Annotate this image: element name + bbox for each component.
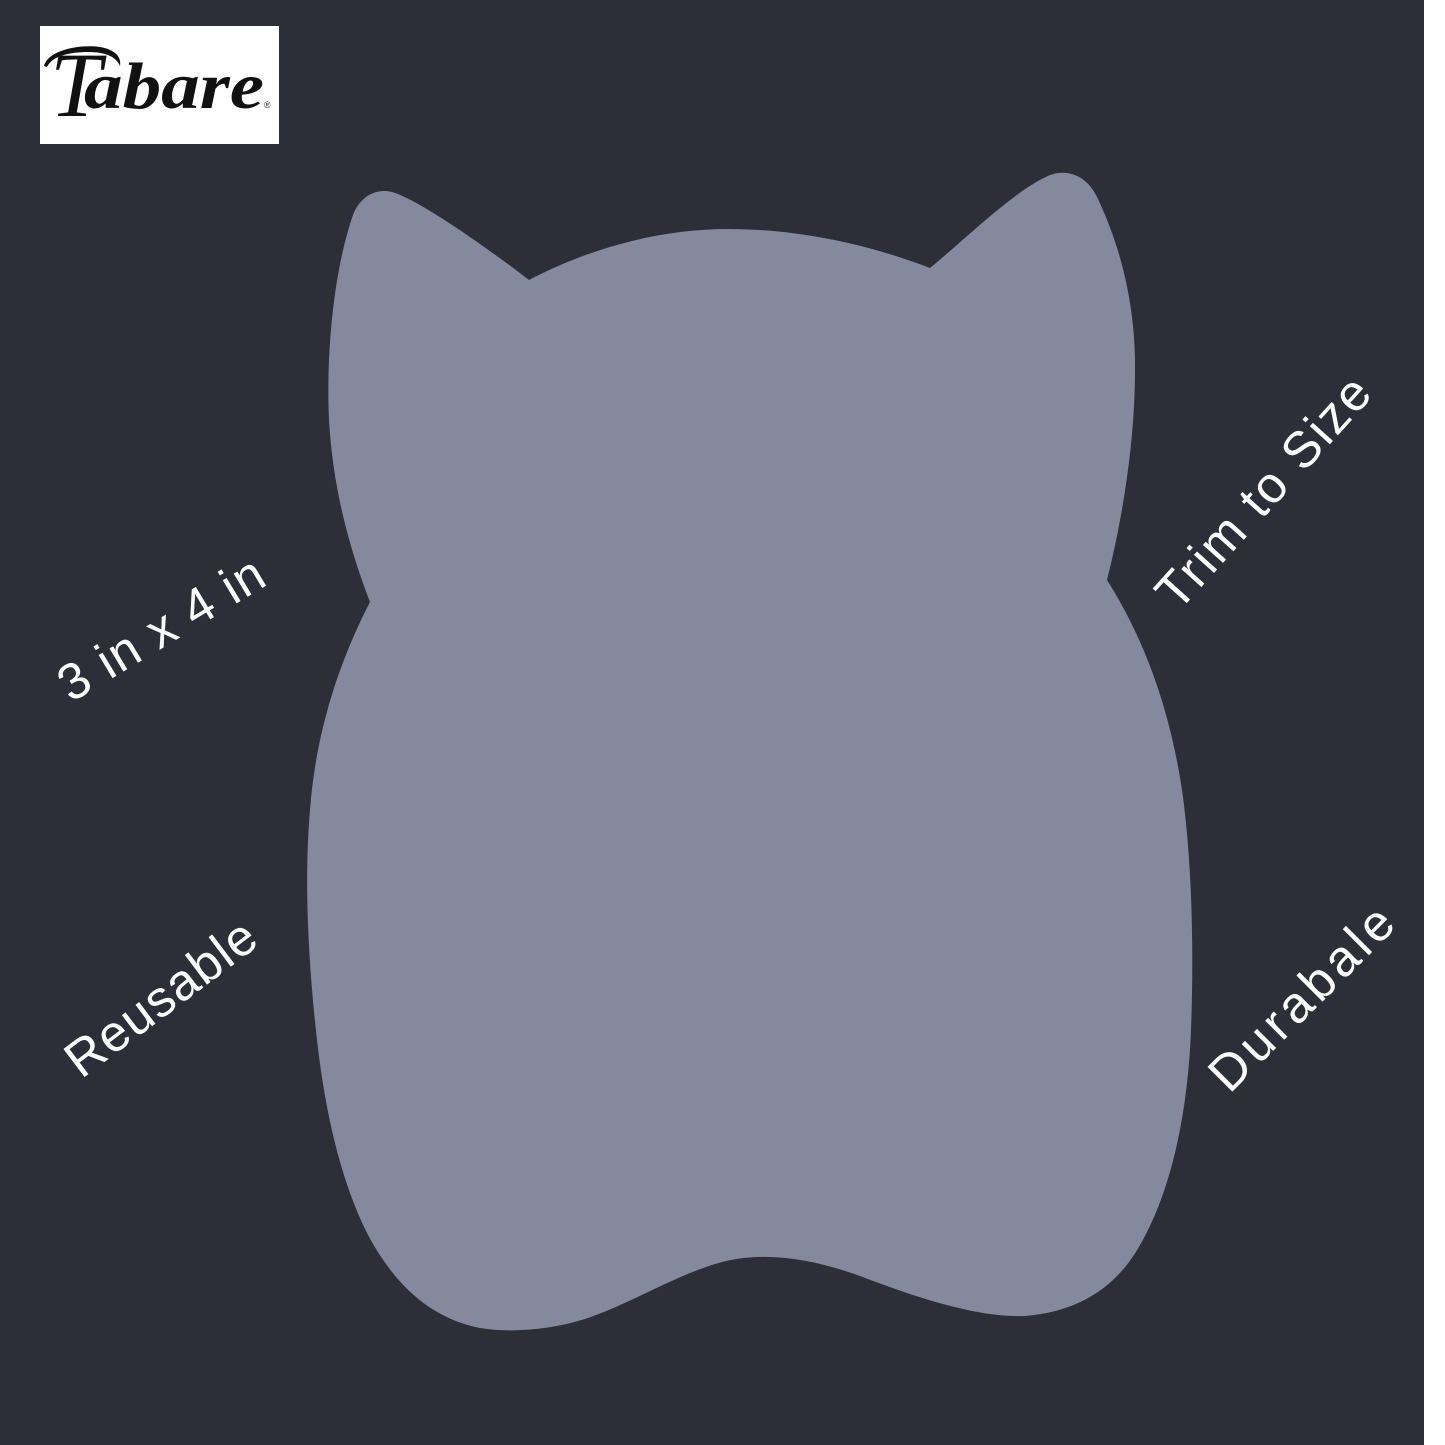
label: Durabale: Durabale [1197,894,1405,1102]
logo: Tabare: abare [84,50,264,123]
label: 3 in x 4 in: 3 in x 4 in [47,545,275,712]
label: Reusable: Reusable [54,907,268,1088]
logo: Tabare [40,26,279,144]
logo: Tabare: T [50,34,107,136]
label: Trim to Size: Trim to Size [1144,364,1382,620]
cat-shaped sticky pad [307,173,1192,1330]
logo: Tabare: ® [264,100,271,110]
